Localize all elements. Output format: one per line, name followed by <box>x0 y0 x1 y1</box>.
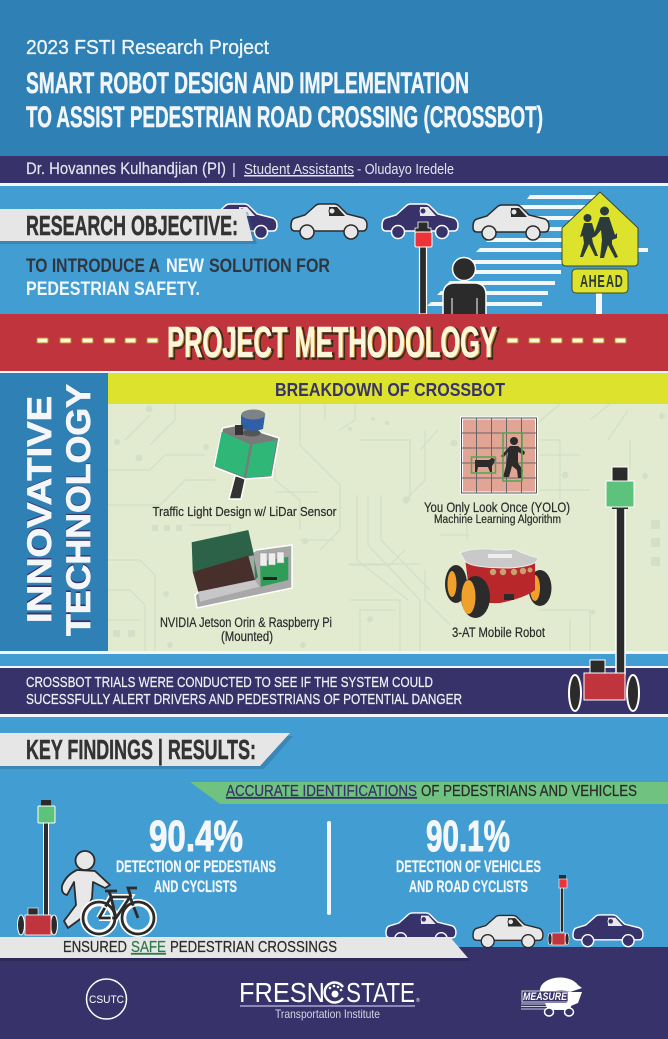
icon: traffic light with lidar <box>214 410 279 499</box>
logo: MEASURE: MEASURE <box>523 991 568 1003</box>
research objective text: TO INTRODUCE A <box>26 256 160 277</box>
author bar <box>0 156 668 186</box>
label: yolo: Machine Learning Algorithm <box>434 514 561 526</box>
research objective text: PEDESTRIAN SAFETY. <box>26 279 200 300</box>
panel: crossbot trials: SUCESSFULLY ALERT DRIVERS AND PEDESTRIANS OF POTENTIAL DANGER <box>26 691 462 708</box>
icon: 3-AT mobile robot <box>445 549 552 618</box>
icons: cars and small crossbot right <box>386 875 643 948</box>
stat: 90.4% pedestrians <box>116 812 276 896</box>
label: nvidia jetson: (Mounted) <box>221 629 273 644</box>
author bar: - Oludayo Iredele <box>357 161 454 178</box>
logo: Fresno State Transportation Institute: FRESN <box>239 977 325 1008</box>
banner: ensured safe pedestrian crossings: ENSURED <box>63 939 127 956</box>
icon: pedestrian crossing sign: A <box>580 271 588 292</box>
icon: small crossbot left <box>18 800 58 935</box>
icon: pedestrian crossing sign: E <box>597 271 605 292</box>
icon: pedestrian crossing sign: H <box>589 271 597 292</box>
label: yolo: You Only Look Once (YOLO) <box>424 499 570 515</box>
label: traffic light design: Traffic Light Design w/ LiDar Sensor <box>152 504 337 519</box>
label: 3-AT mobile robot: 3-AT Mobile Robot <box>452 625 545 640</box>
kicker: 2023 FSTI Research Project: 2023 FSTI Research Project <box>26 37 269 59</box>
banner: accurate identifications <box>190 782 668 804</box>
icon: row of cars <box>201 204 549 240</box>
author bar: Student Assistants <box>244 161 354 178</box>
banner: project methodology <box>0 314 668 373</box>
icon: yolo detection grid <box>462 418 536 493</box>
header background <box>0 0 668 156</box>
band: breakdown of crossbot <box>108 373 668 404</box>
author bar: | <box>232 161 236 178</box>
banner: ensured safe pedestrian crossings: SAFE <box>131 939 166 956</box>
panel: innovative technology: TECHNOLOGY <box>60 384 98 636</box>
banner: accurate identifications: ACCURATE IDENTIFICATIONS <box>226 783 417 800</box>
icon: pedestrian <box>443 258 486 315</box>
panel: crossbot trials: CROSSBOT TRIALS WERE CONDUCTED TO SEE IF THE SYSTEM COULD <box>26 674 433 691</box>
panel: circuit board background <box>108 404 668 651</box>
logo: Fresno State Transportation Institute: Transportation Institute <box>275 1007 380 1021</box>
heading: research objective <box>0 209 257 244</box>
stat: 90.1% vehicles: AND ROAD CYCLISTS <box>409 877 528 896</box>
heading: key findings: KEY FINDINGS | RESULTS: <box>26 734 256 765</box>
crosswalk stripes <box>427 195 648 306</box>
stat: 90.1% vehicles <box>396 812 541 896</box>
author bar: Dr. Hovannes Kulhandjian (PI) <box>26 159 226 178</box>
label: nvidia jetson: NVIDIA Jetson Orin & Raspberry Pi <box>160 615 332 630</box>
title <box>26 67 543 134</box>
stat: 90.4% pedestrians: 90.4% <box>149 812 243 861</box>
stat: 90.4% pedestrians: DETECTION OF PEDESTIANS <box>116 857 276 876</box>
icon: pedestrian crossing sign <box>562 192 638 314</box>
stat: 90.1% vehicles: DETECTION OF VEHICLES <box>396 857 541 876</box>
heading: key findings <box>0 733 293 769</box>
research objective text: NEW <box>166 256 204 277</box>
research objective text <box>26 256 330 300</box>
panel: innovative technology: INNOVATIVE <box>21 396 59 623</box>
band: breakdown of crossbot: BREAKDOWN OF CROSSBOT <box>275 380 505 400</box>
logo: Fresno State Transportation Institute <box>239 977 420 1021</box>
banner: ensured safe pedestrian crossings: PEDESTRIAN CROSSINGS <box>170 939 337 956</box>
icon: pedestrian crossing sign: A <box>606 271 614 292</box>
logo: CSUTC: CSUTC <box>89 994 124 1006</box>
panel: innovative technology: INNOVATIVE <box>21 396 59 621</box>
logo: Fresno State Transportation Institute: STATE <box>346 977 415 1008</box>
icon: traffic light pole <box>415 222 432 314</box>
footer background <box>0 947 668 1039</box>
label: yolo <box>424 499 570 526</box>
heading: research objective: RESEARCH OBJECTIVE: <box>26 210 238 241</box>
icon: pedestrian crossing sign: D <box>615 271 623 292</box>
panel: innovative technology: TECHNOLOGY <box>60 384 98 634</box>
panel: crossbot trials <box>0 668 668 717</box>
icon: person walking a bicycle <box>62 851 154 934</box>
divider <box>327 821 331 915</box>
logo: CSUTC <box>86 979 126 1019</box>
stat: 90.1% vehicles: 90.1% <box>426 812 510 861</box>
stat: 90.4% pedestrians: AND CYCLISTS <box>154 877 237 896</box>
banner: ensured safe pedestrian crossings <box>0 937 470 961</box>
icon: jetson and raspberry pi <box>192 530 292 608</box>
logo: MEASURE <box>521 977 582 1016</box>
logo: Fresno State Transportation Institute: ® <box>416 997 420 1004</box>
research objective text: SOLUTION FOR <box>209 256 330 277</box>
label: nvidia jetson <box>160 615 332 644</box>
divider stripes <box>0 651 668 654</box>
icon: crossbot robot <box>569 467 639 711</box>
panel: innovative technology <box>0 373 108 651</box>
